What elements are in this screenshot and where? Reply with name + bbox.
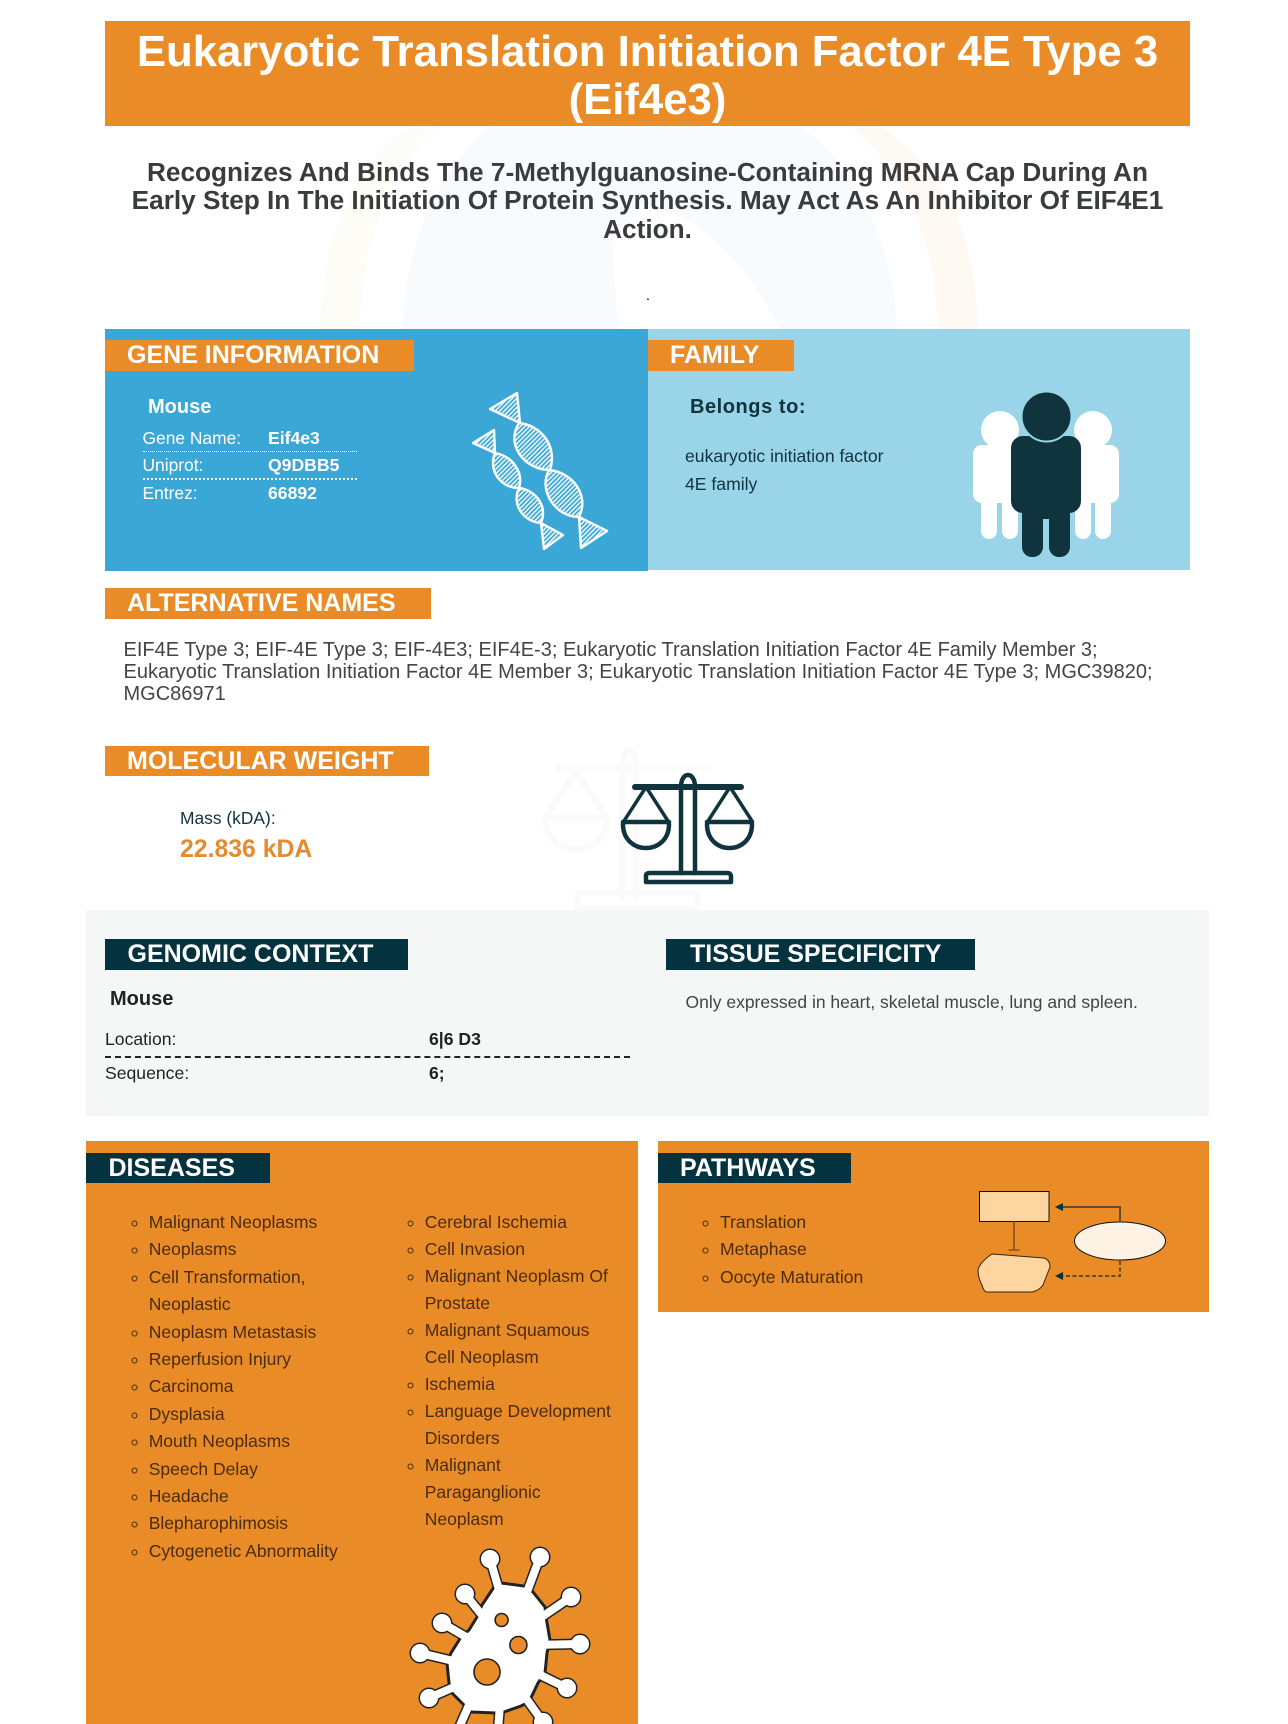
diseases list column 2: Malignant Neoplasm Of	[425, 1266, 608, 1286]
heading: diseases	[86, 1153, 270, 1183]
watermark scale	[0, 0, 1288, 920]
heading: molecular weight: MOLECULAR WEIGHT	[127, 747, 394, 775]
family text: eukaryotic initiation factor	[685, 446, 884, 466]
diseases list column 1: Reperfusion Injury	[149, 1349, 291, 1369]
icon: pathway diagram	[978, 1191, 1166, 1292]
belongs to label: Belongs to:	[690, 396, 806, 418]
diseases list column 1: Dysplasia	[149, 1404, 225, 1424]
heading: diseases: DISEASES	[108, 1154, 235, 1182]
icon: scale	[620, 772, 754, 884]
heading: genomic context: GENOMIC CONTEXT	[128, 940, 373, 968]
dot: .	[646, 287, 650, 303]
uniprot row: Uniprot:	[142, 455, 203, 475]
species: Mouse	[148, 396, 211, 418]
title banner	[105, 21, 1190, 126]
gene name row: Gene Name:	[142, 428, 241, 448]
panel: pathways	[658, 1141, 1209, 1312]
family text: 4E family	[685, 474, 757, 494]
entrez value: 66892	[268, 483, 317, 503]
diseases list column 1: Mouth Neoplasms	[149, 1431, 290, 1451]
pathways list: Metaphase	[720, 1239, 807, 1259]
background watermark	[320, 126, 978, 329]
diseases list column 2: Prostate	[425, 1293, 490, 1313]
diseases list column 1: Cytogenetic Abnormality	[149, 1541, 338, 1561]
diseases list column 2: Cell Invasion	[425, 1239, 525, 1259]
title banner: (Eif4e3)	[569, 75, 726, 124]
diseases list column 2: Paraganglionic	[425, 1482, 541, 1502]
diseases list column 2	[408, 1212, 611, 1529]
subtitle description: Action.	[603, 214, 692, 244]
diseases list column 2: Cell Neoplasm	[425, 1347, 539, 1367]
sequence label: Sequence:	[105, 1063, 189, 1083]
alternative names text: Eukaryotic Translation Initiation Factor 4E Member 3; Eukaryotic Translation Initiation Factor 4E Type 3; MGC39820;	[124, 661, 1153, 683]
diseases list column 2: Ischemia	[425, 1374, 495, 1394]
diseases list column 2: Malignant	[425, 1455, 501, 1475]
diseases list column 1: Neoplasm Metastasis	[149, 1322, 316, 1342]
alternative names text	[124, 638, 1153, 705]
location label: Location:	[105, 1029, 176, 1049]
family text	[685, 446, 884, 494]
diseases list column 2: Malignant Squamous	[425, 1320, 589, 1340]
panel: genomic context and tissue specificity	[86, 910, 1209, 1116]
entrez row: Entrez:	[142, 483, 198, 503]
subtitle description: Recognizes And Binds The 7-Methylguanosine-Containing MRNA Cap During An	[147, 157, 1148, 187]
diseases list column 2: Neoplasm	[425, 1509, 504, 1529]
panel: diseases	[86, 1141, 638, 1724]
pathways list: Translation	[720, 1212, 806, 1232]
uniprot value: Q9DBB5	[268, 455, 339, 475]
diseases list column 2: Language Development	[425, 1401, 611, 1421]
panel: family	[648, 329, 1190, 570]
heading: family	[648, 340, 794, 371]
species: Mouse	[110, 988, 173, 1010]
diseases list column 1: Neoplastic	[149, 1294, 231, 1314]
heading: family: FAMILY	[670, 341, 759, 369]
diseases list column 1: Blepharophimosis	[149, 1513, 288, 1533]
panel: gene information	[105, 329, 648, 571]
diseases list column 1: Carcinoma	[149, 1376, 233, 1396]
alternative names text: EIF4E Type 3; EIF-4E Type 3; EIF-4E3; EIF4E-3; Eukaryotic Translation Initiation Factor 4E Family Member 3;	[124, 638, 1098, 660]
location value: 6|6 D3	[429, 1029, 481, 1049]
pathways list	[702, 1212, 863, 1286]
alternative names text: MGC86971	[124, 683, 226, 705]
sequence value: 6;	[429, 1063, 445, 1083]
tissue text: Only expressed in heart, skeletal muscle, lung and spleen.	[686, 992, 1138, 1012]
subtitle description	[132, 157, 1163, 244]
heading: pathways: PATHWAYS	[680, 1154, 816, 1182]
diseases list column 2: Disorders	[425, 1428, 500, 1448]
diseases list column 2: Cerebral Ischemia	[425, 1212, 567, 1232]
mass label: Mass (kDA):	[180, 808, 276, 828]
heading: tissue specificity: TISSUE SPECIFICITY	[690, 940, 941, 968]
title banner: Eukaryotic Translation Initiation Factor 4E Type 3	[137, 27, 1158, 76]
diseases list column 1	[132, 1212, 338, 1561]
diseases list column 1: Cell Transformation,	[149, 1267, 306, 1287]
pathways list: Oocyte Maturation	[720, 1266, 863, 1286]
icon: dna	[472, 392, 608, 550]
icon: people	[973, 392, 1119, 557]
heading: pathways	[658, 1153, 851, 1183]
diseases list column 1: Speech Delay	[149, 1459, 258, 1479]
diseases list column 1: Malignant Neoplasms	[149, 1212, 317, 1232]
diseases list column 1: Neoplasms	[149, 1239, 236, 1259]
heading: gene information: GENE INFORMATION	[127, 341, 379, 369]
diseases list column 1: Headache	[149, 1486, 229, 1506]
gene name value: Eif4e3	[268, 428, 320, 448]
mass value: 22.836 kDA	[180, 836, 312, 863]
subtitle description: Early Step In The Initiation Of Protein Synthesis. May Act As An Inhibitor Of EIF4E1	[132, 185, 1163, 215]
heading: alternative names: ALTERNATIVE NAMES	[127, 589, 396, 617]
